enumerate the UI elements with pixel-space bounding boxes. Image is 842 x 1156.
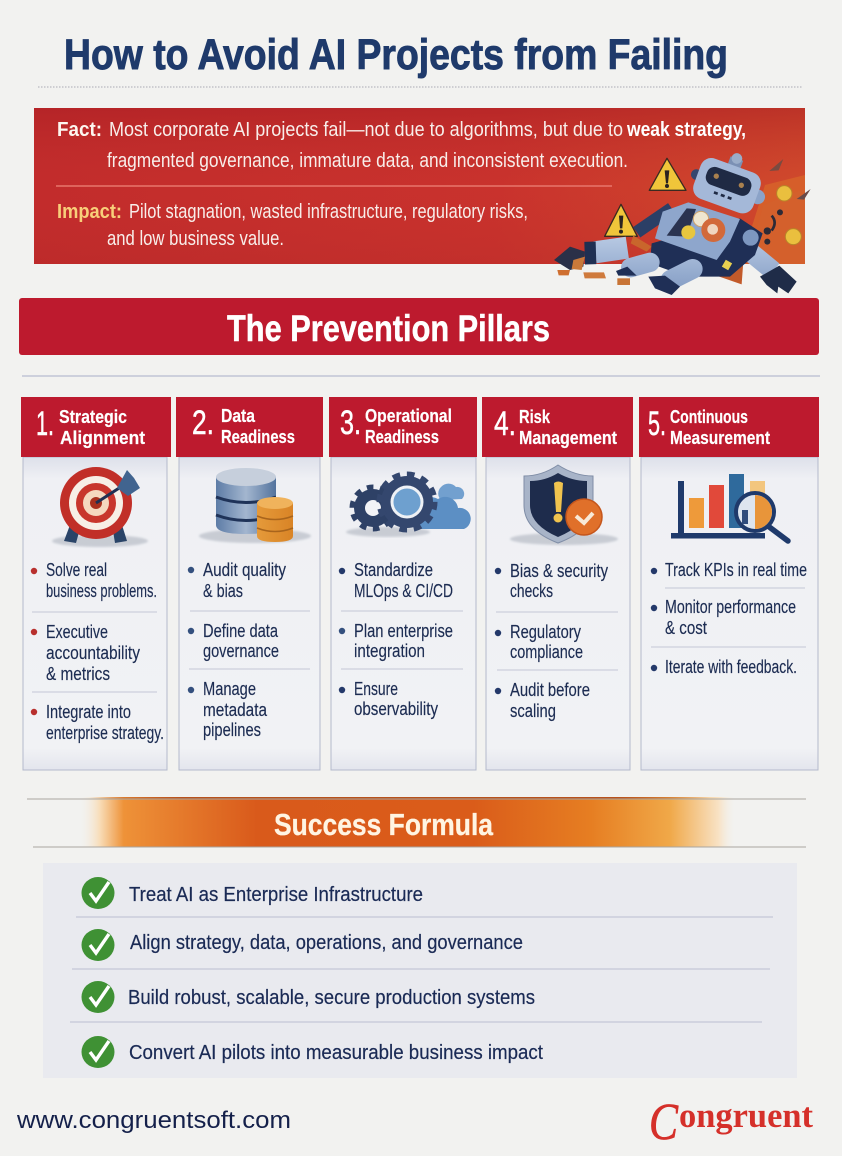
heading: success formula: Success Formula [274, 807, 494, 842]
fact text [57, 118, 746, 172]
bullet list: Ensure [354, 678, 398, 699]
panel: pillar 1 strategic alignment [21, 397, 171, 770]
bullet list: Manage [203, 678, 256, 699]
bullet list: & cost [665, 617, 707, 638]
panel: fact and impact banner [34, 108, 811, 295]
header: Readiness [365, 426, 439, 447]
fact text: Most corporate AI projects fail—not due to algorithms, but due to [109, 118, 623, 141]
bullet list: Integrate into [46, 701, 131, 722]
fact text: weak strategy, [626, 119, 746, 141]
bullet list: observability [354, 698, 439, 719]
bullet list: enterprise strategy. [46, 722, 164, 743]
impact text: and low business value. [107, 227, 284, 250]
bullet list: Monitor performance [665, 596, 796, 617]
row 2: Align strategy, data, operations, and governance [130, 931, 523, 954]
head [684, 140, 776, 219]
header [176, 397, 323, 457]
bullet list: & metrics [46, 663, 110, 684]
icon: target [52, 467, 148, 547]
heading: the prevention pillars [19, 298, 819, 355]
bullet list: Solve real [46, 559, 107, 580]
logo: Congruent: ongruent [679, 1096, 813, 1135]
title: How to Avoid AI Projects from Failing [64, 31, 728, 79]
heading: the prevention pillars: The Prevention Pillars [227, 308, 550, 349]
coins and debris [557, 159, 811, 285]
row 4 [82, 1036, 543, 1068]
impact text [57, 200, 528, 250]
header: Measurement [670, 427, 770, 448]
panel: pillar 5 continuous measurement [639, 397, 819, 770]
header: 5. [648, 405, 666, 443]
bullet list: Regulatory [510, 621, 582, 642]
row 1 [82, 877, 423, 909]
bullet list: governance [203, 640, 279, 661]
header: Readiness [221, 426, 295, 447]
bullet list: business problems. [46, 580, 157, 601]
header: Data [221, 405, 256, 426]
bullet list: & bias [203, 580, 243, 601]
icon: database [199, 468, 311, 543]
impact text: Pilot stagnation, wasted infrastructure, regulatory risks, [129, 200, 528, 223]
panel: pillar 2 data readiness [176, 397, 323, 770]
logo: Congruent [649, 1094, 813, 1151]
logo: Congruent: C [649, 1094, 679, 1151]
header: Strategic [59, 406, 127, 427]
bullet list: Executive [46, 621, 108, 642]
bullet list: Plan enterprise [354, 620, 453, 641]
header: Alignment [60, 427, 145, 448]
bullet list: Audit before [510, 679, 590, 700]
header: Risk [519, 406, 551, 427]
icon: bar chart with magnifier [671, 474, 788, 541]
icon: broken robot [554, 140, 811, 295]
bullet list: Standardize [354, 559, 433, 580]
header: 3. [340, 404, 361, 442]
bullet list: checks [510, 580, 553, 601]
row 3: Build robust, scalable, secure production systems [128, 986, 535, 1009]
legs [616, 262, 693, 295]
left arm [554, 208, 672, 270]
bullet list: metadata [203, 699, 268, 720]
bullet list [188, 559, 310, 740]
header: Operational [365, 405, 452, 426]
row 4: Convert AI pilots into measurable business impact [129, 1041, 543, 1064]
bullet list: pipelines [203, 719, 261, 740]
panel: pillar 4 risk management [482, 397, 633, 770]
bullet list: Iterate with feedback. [665, 656, 797, 677]
warning triangle upper [649, 158, 686, 190]
row 2 [82, 929, 523, 961]
bullet list [495, 560, 618, 721]
header [329, 397, 477, 457]
bullet list: accountability [46, 642, 141, 663]
icon: gears and cloud [346, 475, 471, 537]
bullet list [339, 559, 463, 719]
bullet list [651, 559, 807, 677]
bullet list: scaling [510, 700, 556, 721]
fact text: Fact: [57, 119, 102, 141]
warning triangle lower [605, 204, 637, 236]
right arm [751, 252, 797, 293]
header: Continuous [670, 406, 748, 427]
fact text: fragmented governance, immature data, and inconsistent execution. [107, 149, 628, 172]
impact text: Impact: [57, 201, 122, 223]
header: Management [519, 427, 617, 448]
bullet list: MLOps & CI/CD [354, 580, 453, 601]
row 3 [82, 981, 535, 1013]
header [639, 397, 819, 457]
row 1: Treat AI as Enterprise Infrastructure [129, 883, 423, 906]
torso [650, 202, 763, 277]
header: 4. [494, 405, 516, 443]
heading: success formula [27, 797, 806, 847]
header [482, 397, 633, 457]
bullet list: integration [354, 640, 425, 661]
bullet list: Define data [203, 620, 279, 641]
bullet list: compliance [510, 641, 583, 662]
header [21, 397, 171, 457]
header: 1. [36, 405, 54, 443]
footer website: www.congruentsoft.com [16, 1107, 291, 1134]
header: 2. [192, 404, 214, 442]
panel: success checklist [43, 863, 797, 1078]
bullet list [31, 559, 164, 743]
icon: shield [510, 465, 618, 545]
bullet list: Bias & security [510, 560, 609, 581]
panel: pillar 3 operational readiness [329, 397, 477, 770]
bullet list: Audit quality [203, 559, 287, 580]
